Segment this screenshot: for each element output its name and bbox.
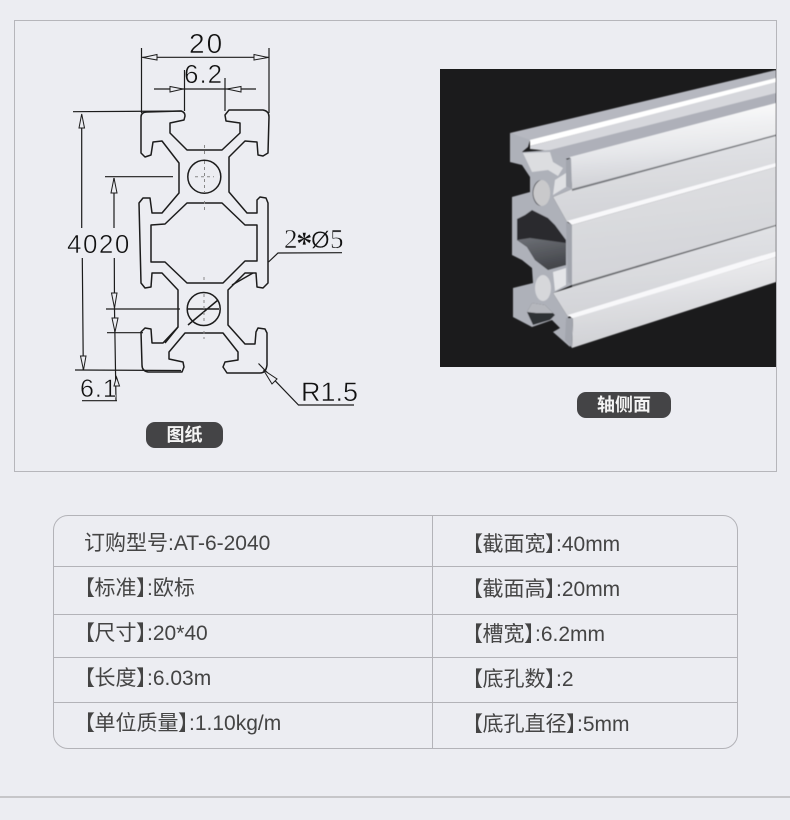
dimension arrowheads <box>79 54 277 386</box>
technical drawing of profile <box>67 28 358 407</box>
spec: slot width: 【槽宽】:6.2mm <box>472 623 605 646</box>
spec: bottom hole diameter: 【底孔直径】:5mm <box>472 713 630 736</box>
dimension lines <box>73 48 354 405</box>
dimension labels: R1.5 <box>301 377 358 407</box>
dimension labels: 5 <box>330 224 344 254</box>
spec: bottom hole count: 【底孔数】:2 <box>472 668 574 691</box>
dimension labels: 6.1 <box>80 375 118 403</box>
lower slot <box>527 303 555 325</box>
lower wedge highlight <box>553 268 566 291</box>
product photo: aluminium extrusion <box>440 69 776 367</box>
dimension labels: 20 <box>189 28 224 59</box>
upper rail grey slab <box>550 93 776 161</box>
end section <box>510 133 572 347</box>
center marks <box>195 145 214 339</box>
spec: length: 【长度】:6.03m <box>84 667 211 690</box>
white highlight line <box>567 163 776 225</box>
upper slot interior <box>523 152 563 176</box>
panel: drawing and photo frame <box>14 20 777 472</box>
spec: section height: 【截面高】:20mm <box>472 578 620 601</box>
center face <box>572 167 776 285</box>
caption pill: drawing: 图纸 <box>166 425 202 445</box>
caption pill: axial side <box>577 392 671 418</box>
dimension labels: * <box>296 226 312 262</box>
dimension labels: 2 <box>284 224 298 254</box>
spec: order model: 订购型号:AT-6-2040 <box>84 532 270 555</box>
lower channel band <box>553 226 776 317</box>
caption pill: drawing <box>146 422 223 448</box>
dimension labels: 4020 <box>67 229 131 259</box>
lower hole <box>535 275 551 301</box>
top strip <box>510 70 776 141</box>
spec: unit mass: 【单位质量】:1.10kg/m <box>84 712 281 735</box>
upper hole <box>533 180 550 206</box>
profile outline <box>139 110 269 373</box>
upper wedge highlight <box>553 173 566 195</box>
spec table <box>53 515 738 749</box>
lower face <box>572 257 776 348</box>
black background <box>440 69 776 367</box>
extrusion body <box>510 70 776 348</box>
upper channel band <box>553 135 776 222</box>
spec: standard: 【标准】:欧标 <box>84 577 195 600</box>
central hollow <box>517 210 566 270</box>
caption pill: axial side: 轴侧面 <box>597 395 651 415</box>
bottom divider <box>0 796 790 798</box>
spec: size: 【尺寸】:20*40 <box>84 622 208 645</box>
edge light <box>566 222 572 285</box>
spec: section width: 【截面宽】:40mm <box>472 533 620 556</box>
dimension labels: Ø <box>311 227 330 254</box>
dimension labels <box>67 28 358 407</box>
upper rail bright face <box>570 103 776 189</box>
row dividers <box>54 516 737 748</box>
dimension labels: 6.2 <box>184 59 223 89</box>
